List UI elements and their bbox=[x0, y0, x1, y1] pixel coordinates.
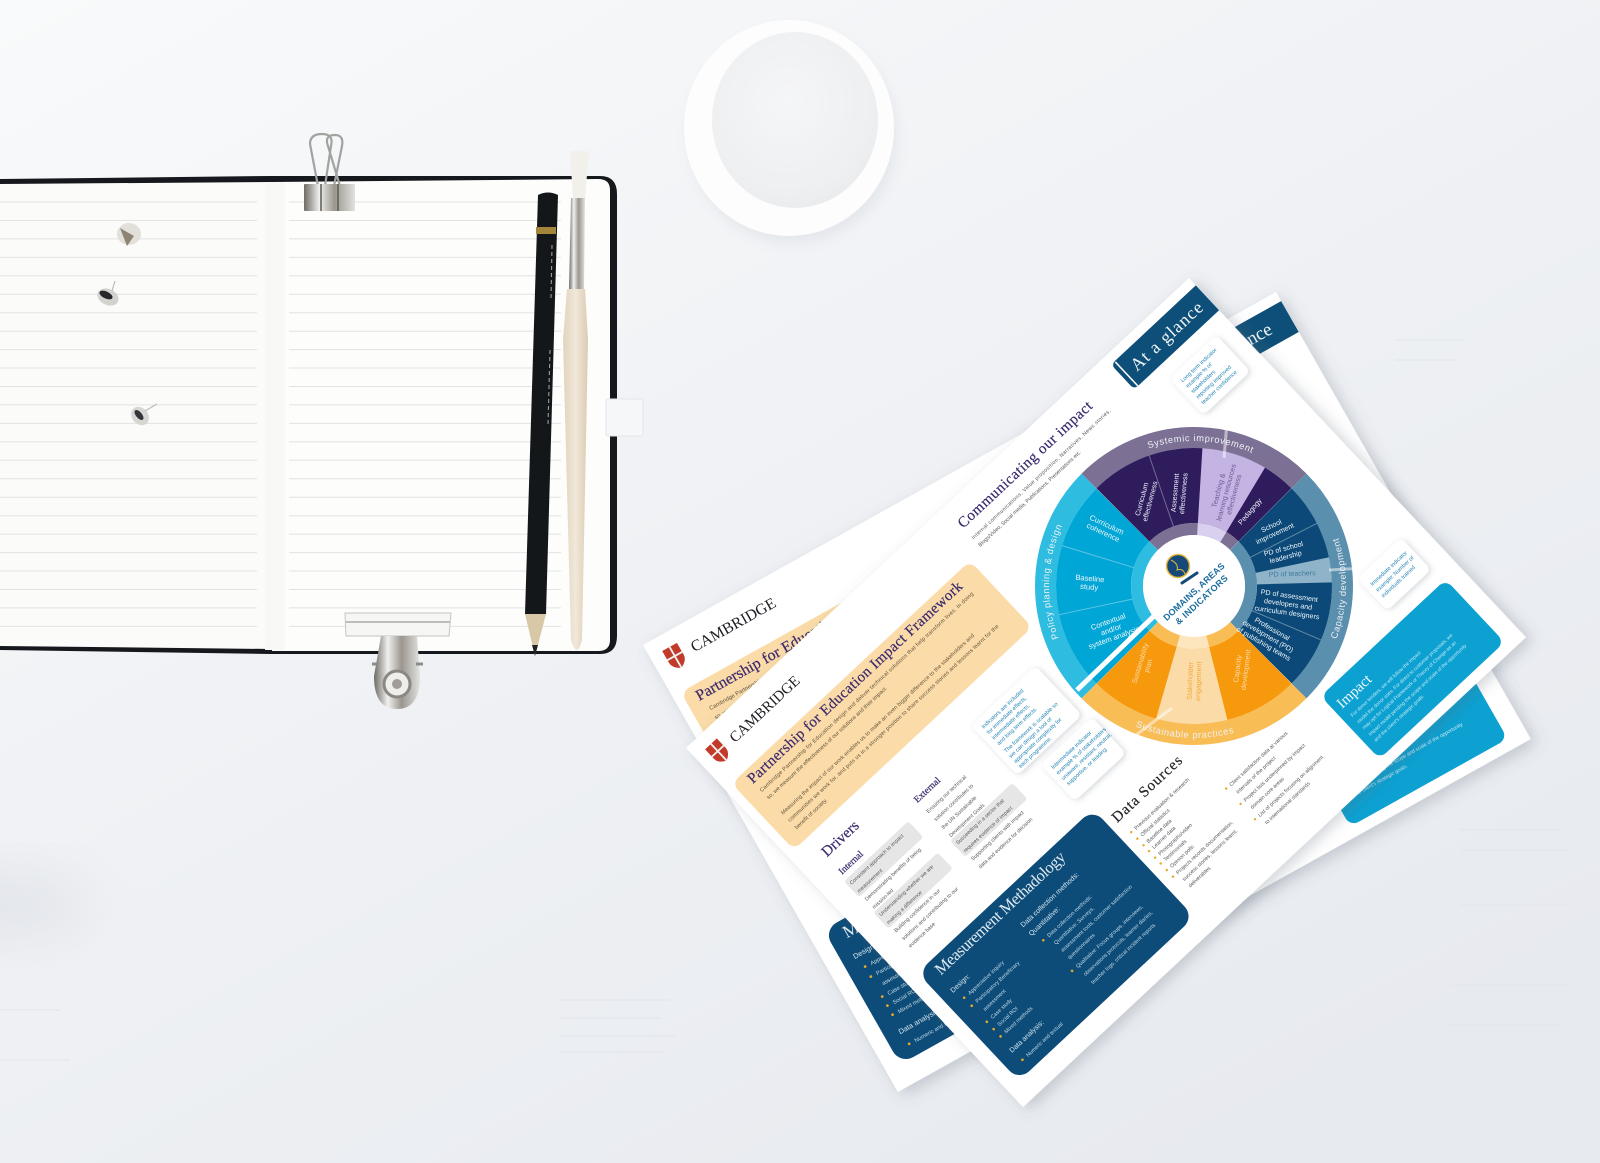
cambridge logo bbox=[705, 670, 806, 766]
curriculum coherence label: Curriculum bbox=[1088, 513, 1125, 537]
impact text: impact model pending the scope and scale of the opportunity bbox=[1368, 643, 1468, 738]
external column: Supporting clients with impact bbox=[970, 810, 1026, 862]
capacity development segment label: Capacity bbox=[1232, 654, 1243, 683]
internal column: solutions and contributing to our bbox=[901, 886, 960, 942]
curriculum coherence label: coherence bbox=[1085, 521, 1121, 544]
back logo: CAMBRIDGE bbox=[688, 595, 779, 656]
ruled lines right page bbox=[289, 202, 561, 626]
external column: Development Goals bbox=[948, 803, 987, 839]
capacity development label: Capacity development bbox=[1331, 538, 1347, 638]
design list: Design: bbox=[950, 973, 972, 995]
intermediate indicator callout: Intermediate indicator bbox=[1050, 730, 1093, 771]
pd of assessment developers label: developers and bbox=[1264, 597, 1313, 612]
bottom bulldog clip bbox=[345, 613, 451, 709]
back sheet paper bbox=[643, 292, 1531, 1092]
school improvement label: School bbox=[1260, 518, 1283, 534]
back measurement panel: Data analysis: bbox=[897, 1006, 942, 1036]
external column: requires evidence of impact bbox=[963, 805, 1014, 854]
paint brush bbox=[563, 150, 589, 650]
back measurement panel: assessment bbox=[881, 967, 911, 987]
notebook bbox=[0, 134, 643, 709]
intermediate indicator callout: unaware, resistant, neutral, bbox=[1061, 732, 1114, 782]
data sources column two: Project lists underpinned by impact bbox=[1243, 743, 1307, 803]
design list: Data analysis: bbox=[1009, 1019, 1046, 1055]
data sources column two: Client satisfaction data at various bbox=[1228, 730, 1290, 788]
data sources column one: Projects records documentation, bbox=[1175, 820, 1235, 876]
impact text: model the donor uses. For direct to customer proposals, we bbox=[1356, 633, 1454, 725]
indicators callout: we can design a tool of bbox=[1008, 716, 1054, 760]
long term indicator callout: reporting improved bbox=[1195, 365, 1233, 400]
long term indicator callout: teacher confidence bbox=[1201, 370, 1239, 406]
push pins bbox=[95, 223, 157, 429]
data sources column one bbox=[1130, 775, 1247, 893]
front sheet bbox=[686, 278, 1526, 1107]
intermediate indicator callout: supportive, or leading bbox=[1066, 747, 1108, 787]
printed sheets bbox=[643, 278, 1539, 1111]
indicators callout bbox=[971, 666, 1082, 775]
back intro panel: so, we measure the effectiveness of our solutions bbox=[714, 654, 827, 721]
measurement methodology panel bbox=[918, 809, 1194, 1081]
communicating our impact section: Blogs/Video, Social media, Publications, Presentations etc. bbox=[978, 450, 1083, 548]
right page bbox=[272, 179, 610, 651]
main title: Partnership for Education Impact Framework bbox=[745, 578, 966, 787]
back logo bbox=[662, 592, 781, 672]
data collection list: Quantitative: Surveys, bbox=[1053, 906, 1096, 946]
impact text bbox=[1350, 624, 1474, 743]
baseline study label: study bbox=[1080, 582, 1099, 592]
data collection list: observations protocols, learner diaries, bbox=[1083, 910, 1155, 978]
external column: solution contributes to bbox=[933, 783, 975, 823]
at a glance tab: At a glance bbox=[1126, 297, 1207, 375]
professional development label: Professional bbox=[1253, 616, 1291, 643]
design list: Social ROI bbox=[997, 1006, 1020, 1028]
external column: Succeeding in a sector that bbox=[955, 798, 1006, 846]
long term indicator callout: stakeholders bbox=[1190, 369, 1217, 395]
cambridge logo: CAMBRIDGE bbox=[727, 673, 804, 746]
stakeholder engagement label: Stakeholder bbox=[1186, 661, 1195, 700]
data sources column two: List of projects focusing on alignment bbox=[1257, 755, 1325, 819]
communicating our impact section bbox=[955, 392, 1119, 548]
back measurement panel: Mixed methods bbox=[897, 991, 934, 1015]
pedagogy label: Pedagogy bbox=[1237, 497, 1264, 527]
pd of teachers label: PD of teachers bbox=[1269, 569, 1316, 579]
communicating text: Internal communications, Value proposition, Narratives, News stories, bbox=[971, 408, 1112, 541]
back impact panel: and the client's strategic goals. bbox=[1345, 763, 1409, 803]
design list: Appreciative inquiry bbox=[967, 960, 1006, 997]
teaching resources label: learning resources bbox=[1215, 463, 1238, 522]
indicators callout: appropriate complexity for bbox=[1013, 717, 1064, 765]
data sources column one: Official statistics bbox=[1140, 808, 1172, 838]
systemic improvement quadrant bbox=[984, 376, 1404, 796]
design list: Case study bbox=[990, 998, 1014, 1021]
back measurement panel: Participatory Beneficiary bbox=[875, 942, 932, 977]
design list bbox=[950, 942, 1072, 1066]
back impact panel bbox=[1306, 661, 1508, 827]
front sheet paper bbox=[686, 278, 1526, 1107]
data sources column two: domain core areas bbox=[1250, 776, 1286, 811]
policy planning label: Policy planning & design bbox=[1042, 524, 1062, 640]
back measurement panel: Case study bbox=[887, 978, 915, 997]
wheel centre disc bbox=[1143, 535, 1245, 637]
indicators callout: for immediate effects, bbox=[986, 695, 1029, 736]
curriculum effectiveness label: Curriculum bbox=[1134, 482, 1150, 517]
back intro panel bbox=[681, 525, 1028, 775]
immediate indicator callout: Immediate indicator bbox=[1370, 550, 1409, 588]
external column: Ensuring our technical bbox=[926, 775, 968, 815]
drivers section bbox=[816, 722, 1049, 951]
notebook cover bbox=[0, 176, 617, 654]
internal column: Understanding whether we are bbox=[878, 864, 935, 918]
back at a glance tab: At a glance bbox=[1190, 319, 1276, 379]
sustainability plan label: Sustainability bbox=[1130, 642, 1150, 685]
elastic strap bbox=[606, 399, 643, 436]
indicators callout: each programme. bbox=[1018, 736, 1054, 770]
data sources column one: Photographs/video bbox=[1157, 823, 1194, 857]
intro text: benefit of society. bbox=[794, 797, 829, 831]
communicating heading: Communicating our impact bbox=[955, 398, 1097, 532]
white cup bbox=[684, 20, 896, 242]
icon: globe bbox=[1166, 554, 1197, 583]
design list: Participatory Beneficiary bbox=[975, 960, 1022, 1005]
professional development label: development (PD) bbox=[1241, 619, 1295, 654]
internal column: mission-led bbox=[872, 888, 895, 911]
systemic improvement label: Systemic improvement bbox=[1148, 434, 1254, 453]
assessment effectiveness label: effectiveness bbox=[1178, 472, 1190, 514]
indicators callout: The framework is scalable so bbox=[1003, 701, 1060, 754]
callout leader lines bbox=[1132, 398, 1366, 738]
drivers heading: Drivers bbox=[819, 818, 863, 860]
data sources column one: Testimonials bbox=[1163, 838, 1189, 863]
capacity development quadrant bbox=[984, 376, 1404, 796]
back intro panel: Partnership for Education Impact Framework bbox=[693, 550, 952, 705]
school improvement label: improvement bbox=[1255, 522, 1295, 546]
back measurement panel: Numeric and textual bbox=[914, 1014, 961, 1044]
sustainability plan label: plan bbox=[1143, 658, 1154, 673]
ruled lines left page bbox=[0, 202, 257, 626]
wheel centre title: DOMAINS, AREAS bbox=[1161, 561, 1227, 623]
left page bbox=[0, 182, 272, 649]
back at a glance tab bbox=[1174, 301, 1299, 392]
intro text: communities we work for, and puts us in a stronger position to share success stories and lessons learnt for the bbox=[787, 624, 1000, 824]
data collection list: assessment tools, customer satisfaction bbox=[1060, 884, 1134, 954]
back measurement panel: Appreciative inquiry bbox=[870, 938, 916, 967]
data sources column two bbox=[1225, 724, 1332, 829]
data sources section bbox=[1109, 681, 1332, 900]
black pencil bbox=[525, 192, 558, 656]
intro text: Measuring the impact of our work enables us to make an even bigger difference to the stakeholders and bbox=[780, 633, 976, 816]
capacity development segment label: development bbox=[1240, 649, 1253, 690]
data sources column one: deliverables bbox=[1188, 865, 1213, 889]
data sources column one: Learner data bbox=[1151, 826, 1177, 851]
internal column: Consistent approach to impact bbox=[849, 833, 906, 887]
pd of school leadership label: leadership bbox=[1269, 549, 1303, 565]
contextual analysis label: and/or bbox=[1099, 622, 1123, 638]
data sources column one: Previous evaluation & research bbox=[1133, 777, 1191, 832]
long term indicator callout bbox=[1169, 335, 1250, 415]
binder clip top bbox=[304, 134, 355, 211]
domains wheel bbox=[1035, 427, 1353, 745]
long term indicator callout: example % of bbox=[1185, 362, 1214, 389]
data sources column one: Opinion polls bbox=[1169, 844, 1196, 870]
internal column: Demonstrating benefits of being bbox=[864, 847, 923, 903]
impact panel bbox=[1321, 579, 1505, 759]
external column bbox=[911, 741, 1042, 872]
baseline study label: Baseline bbox=[1075, 573, 1105, 584]
impact text: For donor tenders, we will follow the impact bbox=[1350, 650, 1423, 719]
impact title: Impact bbox=[1334, 671, 1376, 712]
data sources column two: to international standards bbox=[1264, 781, 1312, 826]
white gap between quadrants bbox=[1077, 616, 1154, 690]
back measurement panel bbox=[824, 807, 1121, 1064]
internal column: making a difference bbox=[886, 890, 924, 926]
pd of assessment developers label: curriculum designers bbox=[1254, 604, 1320, 621]
page gutter bbox=[265, 182, 285, 650]
data collection list: Qualitative: Focus groups, interviews, bbox=[1075, 904, 1145, 970]
intermediate indicator callout: example % of stakeholders bbox=[1056, 727, 1108, 776]
indicators callout: intermediate effects, bbox=[991, 703, 1032, 741]
back measurement panel: Social ROI bbox=[892, 987, 919, 1006]
at a glance tab bbox=[1111, 285, 1219, 389]
pd of school leadership label: PD of school bbox=[1263, 540, 1304, 558]
indicators callout: Indicators are included bbox=[981, 688, 1025, 730]
curriculum effectiveness label: effectiveness bbox=[1141, 480, 1160, 522]
data collection list bbox=[1020, 851, 1164, 994]
data collection list: Data collection methods: bbox=[1020, 872, 1081, 929]
data sources column one: success stories, lessons learnt, bbox=[1181, 828, 1239, 883]
internal column bbox=[835, 812, 974, 951]
indicators callout: and long term effects. bbox=[996, 706, 1039, 747]
internal column: Building confidence in our bbox=[893, 888, 942, 934]
data sources column two: intervals of the project bbox=[1235, 755, 1278, 795]
external column: the UN Sustainable bbox=[941, 795, 978, 831]
contextual analysis label: Contextual bbox=[1090, 611, 1127, 632]
back impact panel: impact model pending the scope and scale of the opportunity bbox=[1340, 722, 1465, 795]
back measurement panel: Design: bbox=[851, 941, 878, 961]
sustainable practices label: Sustainable practices bbox=[1136, 721, 1234, 740]
internal column: measurement bbox=[856, 868, 885, 895]
data collection list: Quantitative: bbox=[1028, 906, 1062, 938]
data collection list: teacher logs, critical incident reports bbox=[1090, 922, 1157, 986]
internal column: evidence base bbox=[908, 922, 937, 949]
data collection list: Data collection methods: bbox=[1046, 894, 1094, 939]
back intro panel: Cambridge Partnership for Education design and deliver technical solutions bbox=[709, 613, 880, 712]
assessment effectiveness label: Assessment bbox=[1170, 473, 1181, 512]
contextual analysis label: system analysis bbox=[1087, 624, 1141, 651]
intermediate indicator callout bbox=[1041, 715, 1128, 801]
impact text: and the client's strategic goals. bbox=[1373, 693, 1426, 743]
immediate indicator callout bbox=[1357, 538, 1431, 611]
professional development label: of publishing teams bbox=[1235, 625, 1292, 663]
sustainable practices quadrant bbox=[984, 376, 1404, 796]
intro text: Cambridge Partnership for Education design and deliver technical solutions that help transform lives. In doing bbox=[759, 591, 975, 794]
wheel centre title: & INDICATORS bbox=[1173, 573, 1230, 627]
data sources column one: Baseline data bbox=[1146, 818, 1173, 845]
stakeholder engagement label: engagement bbox=[1194, 661, 1203, 701]
external column: data and evidence for decision bbox=[978, 817, 1034, 870]
immediate indicator callout: individuals trained bbox=[1381, 565, 1417, 599]
data sources heading: Data Sources bbox=[1109, 753, 1186, 826]
design list: Mixed methods bbox=[1004, 1006, 1035, 1035]
policy planning and design quadrant bbox=[984, 376, 1404, 796]
data collection list: questionnaires bbox=[1067, 932, 1097, 961]
internal column: Internal bbox=[837, 849, 866, 877]
teaching resources label: Teaching & bbox=[1210, 472, 1227, 508]
immediate indicator callout: example: Number of bbox=[1375, 555, 1416, 593]
back measurement panel: Measurement Methadology bbox=[839, 829, 1021, 942]
design list: Numeric and textual bbox=[1025, 1021, 1065, 1059]
design list: assessment bbox=[982, 988, 1008, 1013]
measurement title: Measurement Methadology bbox=[931, 847, 1070, 979]
teaching resources label: effectiveness bbox=[1225, 473, 1244, 516]
external column: External bbox=[913, 776, 943, 805]
impact text: may opt for Logical Framework or Theory of Change as an bbox=[1361, 640, 1458, 731]
long term indicator callout: Long term indicator bbox=[1180, 347, 1219, 384]
intro text: so, we measure the effectiveness of our solutions and their impact. bbox=[766, 685, 889, 801]
pd of assessment developers label: PD of assessment bbox=[1260, 588, 1318, 604]
segment separators bbox=[1059, 456, 1321, 640]
intro panel bbox=[732, 561, 1032, 850]
back sheet bbox=[643, 292, 1531, 1092]
